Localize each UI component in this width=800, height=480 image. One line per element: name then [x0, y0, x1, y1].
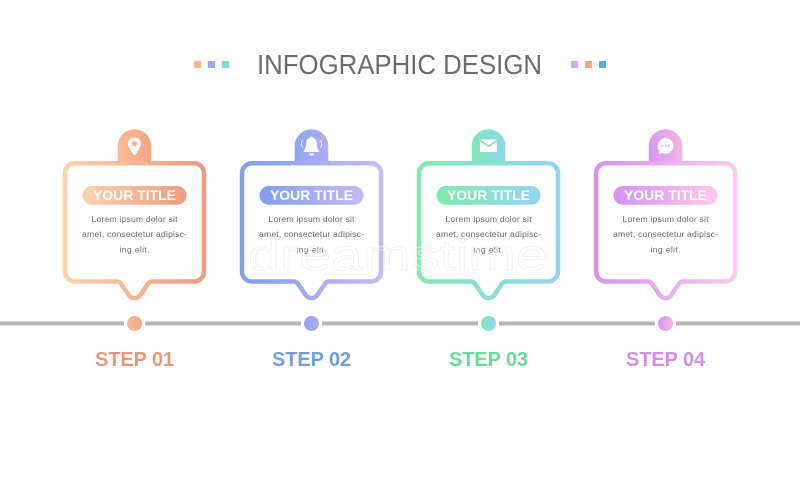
decorative squares left	[194, 61, 229, 68]
title pill	[260, 186, 364, 205]
body text	[82, 214, 187, 254]
title pill: YOUR TITLE	[93, 188, 176, 203]
body text: Lorem ipsum dolor sit	[92, 214, 178, 224]
tab with envelope icon	[472, 129, 505, 164]
step label 04: STEP 04	[626, 348, 706, 371]
body text: amet, consectetur adipisc-	[613, 229, 718, 239]
title pill	[614, 186, 718, 205]
body text: ing elit.	[650, 244, 680, 254]
body text: ing elit.	[474, 244, 504, 254]
title pill: YOUR TITLE	[270, 188, 353, 203]
tab with location icon	[118, 129, 151, 164]
panel: step 02	[242, 129, 381, 298]
speech bubble frame	[419, 163, 558, 298]
panel: step 04	[596, 129, 735, 298]
body text	[259, 214, 364, 254]
decorative squares right	[571, 61, 606, 68]
step label 01: STEP 01	[95, 348, 174, 371]
body text: Lorem ipsum dolor sit	[446, 214, 532, 224]
title pill: YOUR TITLE	[447, 188, 530, 203]
tab with chat icon	[649, 129, 682, 164]
title: INFOGRAPHIC DESIGN	[257, 49, 542, 80]
timeline dot 02	[304, 316, 319, 331]
title pill	[436, 186, 540, 205]
body text	[613, 214, 718, 254]
body text: ing elit.	[120, 244, 150, 254]
watermark: dreamstime	[248, 231, 548, 280]
step label 02: STEP 02	[272, 348, 351, 371]
tab with bell icon	[295, 129, 328, 164]
speech bubble frame	[596, 163, 735, 298]
body text: amet, consectetur adipisc-	[82, 229, 187, 239]
body text: amet, consectetur adipisc-	[259, 229, 364, 239]
body text: amet, consectetur adipisc-	[436, 229, 541, 239]
timeline line	[0, 322, 800, 326]
timeline dot 04	[658, 316, 673, 331]
panel: step 01	[65, 129, 204, 298]
panel: step 03	[419, 129, 558, 298]
step label 03: STEP 03	[449, 348, 528, 371]
body text	[436, 214, 541, 254]
body text: ing elit.	[296, 244, 326, 254]
body text: Lorem ipsum dolor sit	[622, 214, 709, 224]
body text: Lorem ipsum dolor sit	[268, 214, 355, 224]
title pill: YOUR TITLE	[624, 188, 707, 203]
speech bubble frame	[242, 163, 381, 298]
title pill	[82, 186, 186, 205]
timeline dot 01	[127, 316, 142, 331]
speech bubble frame	[65, 163, 204, 298]
timeline dot 03	[481, 316, 496, 331]
